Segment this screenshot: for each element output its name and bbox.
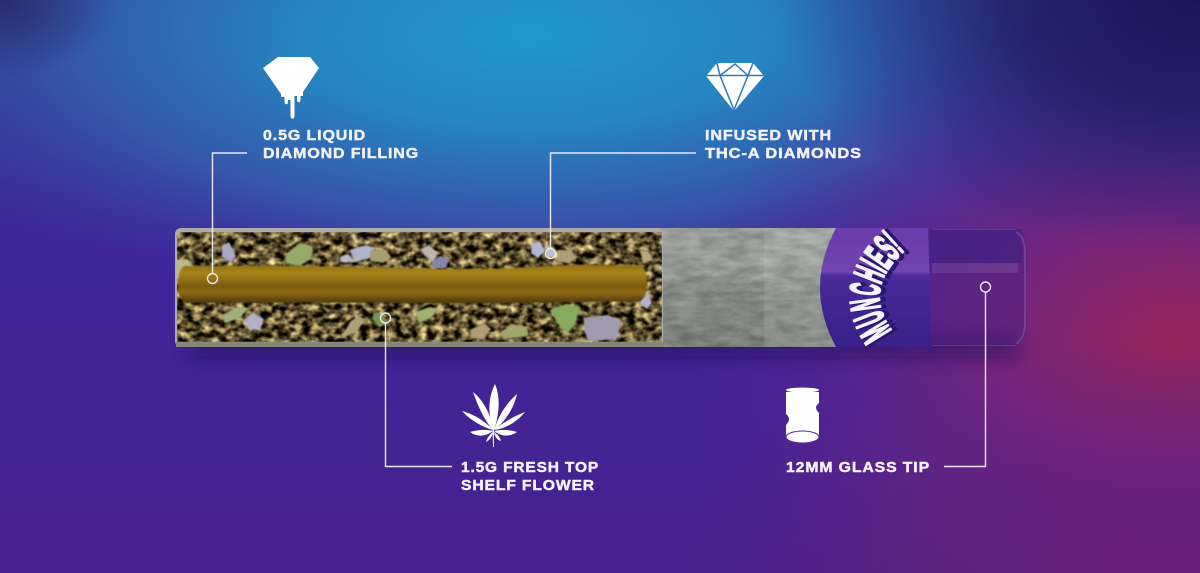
- label: 0.5G LIQUID: [263, 128, 366, 144]
- icon: glass tube: [786, 388, 819, 443]
- callout: THC-A diamonds: [546, 63, 862, 258]
- icon: diamond: [706, 63, 764, 111]
- callout: fresh flower: [380, 313, 599, 494]
- MUNCHIES logo: MUNCHIES!: [849, 229, 904, 346]
- flower chunks: [176, 241, 653, 341]
- MUNCHIES logo: MUNCHIES!: [852, 228, 910, 347]
- label: THC-A DIAMONDS: [705, 146, 862, 162]
- leader line: [546, 153, 696, 258]
- callout: glass tip: [786, 282, 990, 476]
- pre-roll cross-section: [175, 228, 1027, 347]
- label: INFUSED WITH: [705, 128, 832, 144]
- liquid diamond core: [178, 265, 647, 303]
- callout: liquid diamond filling: [208, 57, 419, 284]
- leader line: [380, 313, 452, 466]
- icon: dripping diamond: [263, 57, 319, 119]
- rolling paper: [655, 228, 845, 347]
- leader line: [944, 282, 990, 466]
- label: 1.5G FRESH TOP: [461, 460, 599, 476]
- leader line: [208, 153, 247, 284]
- label: 12MM GLASS TIP: [786, 460, 930, 476]
- label: DIAMOND FILLING: [263, 146, 419, 162]
- joint shadow: [190, 338, 1020, 356]
- flower chamber: [175, 228, 663, 347]
- glass tip: [928, 229, 1027, 346]
- icon: cannabis leaf: [462, 384, 525, 447]
- purple brand band: [820, 228, 931, 347]
- label: SHELF FLOWER: [461, 478, 595, 494]
- MUNCHIES logo: [849, 228, 910, 347]
